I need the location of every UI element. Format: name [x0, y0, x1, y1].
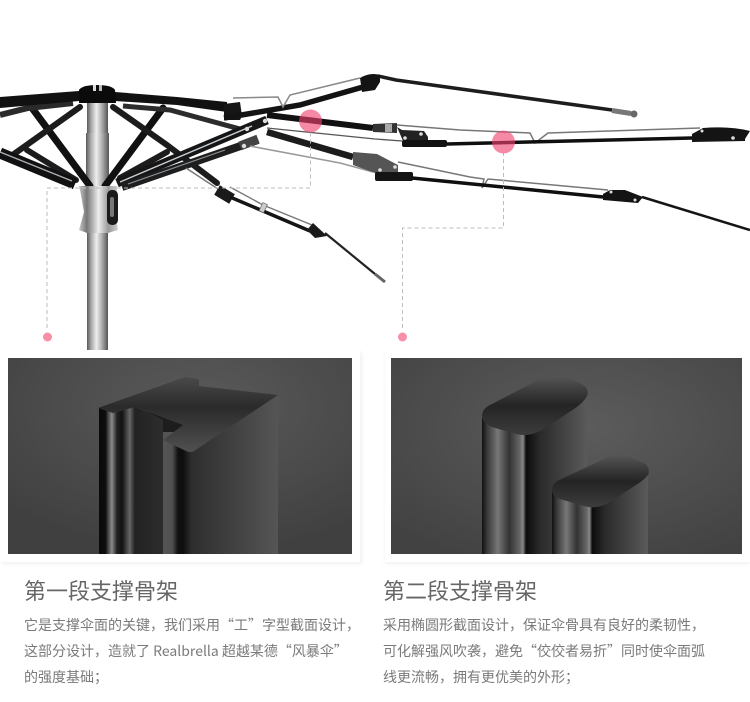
description: second section: 线更流畅，拥有更优美的外形；: [383, 667, 579, 687]
description: first section: 它是支撑伞面的关键，我们采用“工”字型截面设计，: [24, 615, 360, 635]
text block: first section: [24, 574, 360, 687]
description: second section: 采用椭圆形截面设计，保证伞骨具有良好的柔韧性，: [383, 615, 705, 635]
description: first section: 的强度基础；: [24, 667, 108, 687]
short column: [552, 455, 649, 554]
cross braces: [14, 107, 217, 186]
tall column: [482, 376, 588, 554]
center pole: [86, 102, 109, 350]
top face: [98, 377, 278, 452]
right arms: [117, 119, 267, 187]
description: first section: [24, 615, 360, 687]
callout line: second section: [402, 130, 515, 328]
text block: second section: [383, 574, 705, 687]
marker: first section large dot: [299, 110, 322, 132]
umbrella frame diagram: [0, 74, 750, 350]
heading: second section: 第二段支撑骨架: [383, 574, 537, 606]
description: second section: [383, 615, 705, 687]
description: second section: 可化解强风吹袭，避免“佼佼者易折”同时使伞面弧: [383, 641, 705, 661]
heading: first section: 第一段支撑骨架: [24, 574, 178, 606]
lower rib: [250, 132, 750, 230]
description: first section: 这部分设计，造就了 Realbrella 超越某德“风暴伞”: [24, 641, 348, 661]
image: I-beam cross section: [8, 358, 352, 554]
upper rib: [224, 74, 638, 118]
image: oval cross section: [391, 358, 742, 554]
runner hub: [79, 186, 118, 233]
panel: second section card: [385, 350, 750, 562]
panel: first section card: [0, 350, 360, 562]
callout line: first section: [47, 110, 322, 328]
middle rib: [267, 115, 750, 147]
marker: first section small dot: [43, 332, 52, 342]
top rib and hub: [0, 85, 242, 129]
drooping rib: [186, 168, 385, 282]
marker: second section large dot: [492, 130, 515, 154]
marker: second section small dot: [398, 332, 407, 342]
left arms: [0, 103, 75, 184]
